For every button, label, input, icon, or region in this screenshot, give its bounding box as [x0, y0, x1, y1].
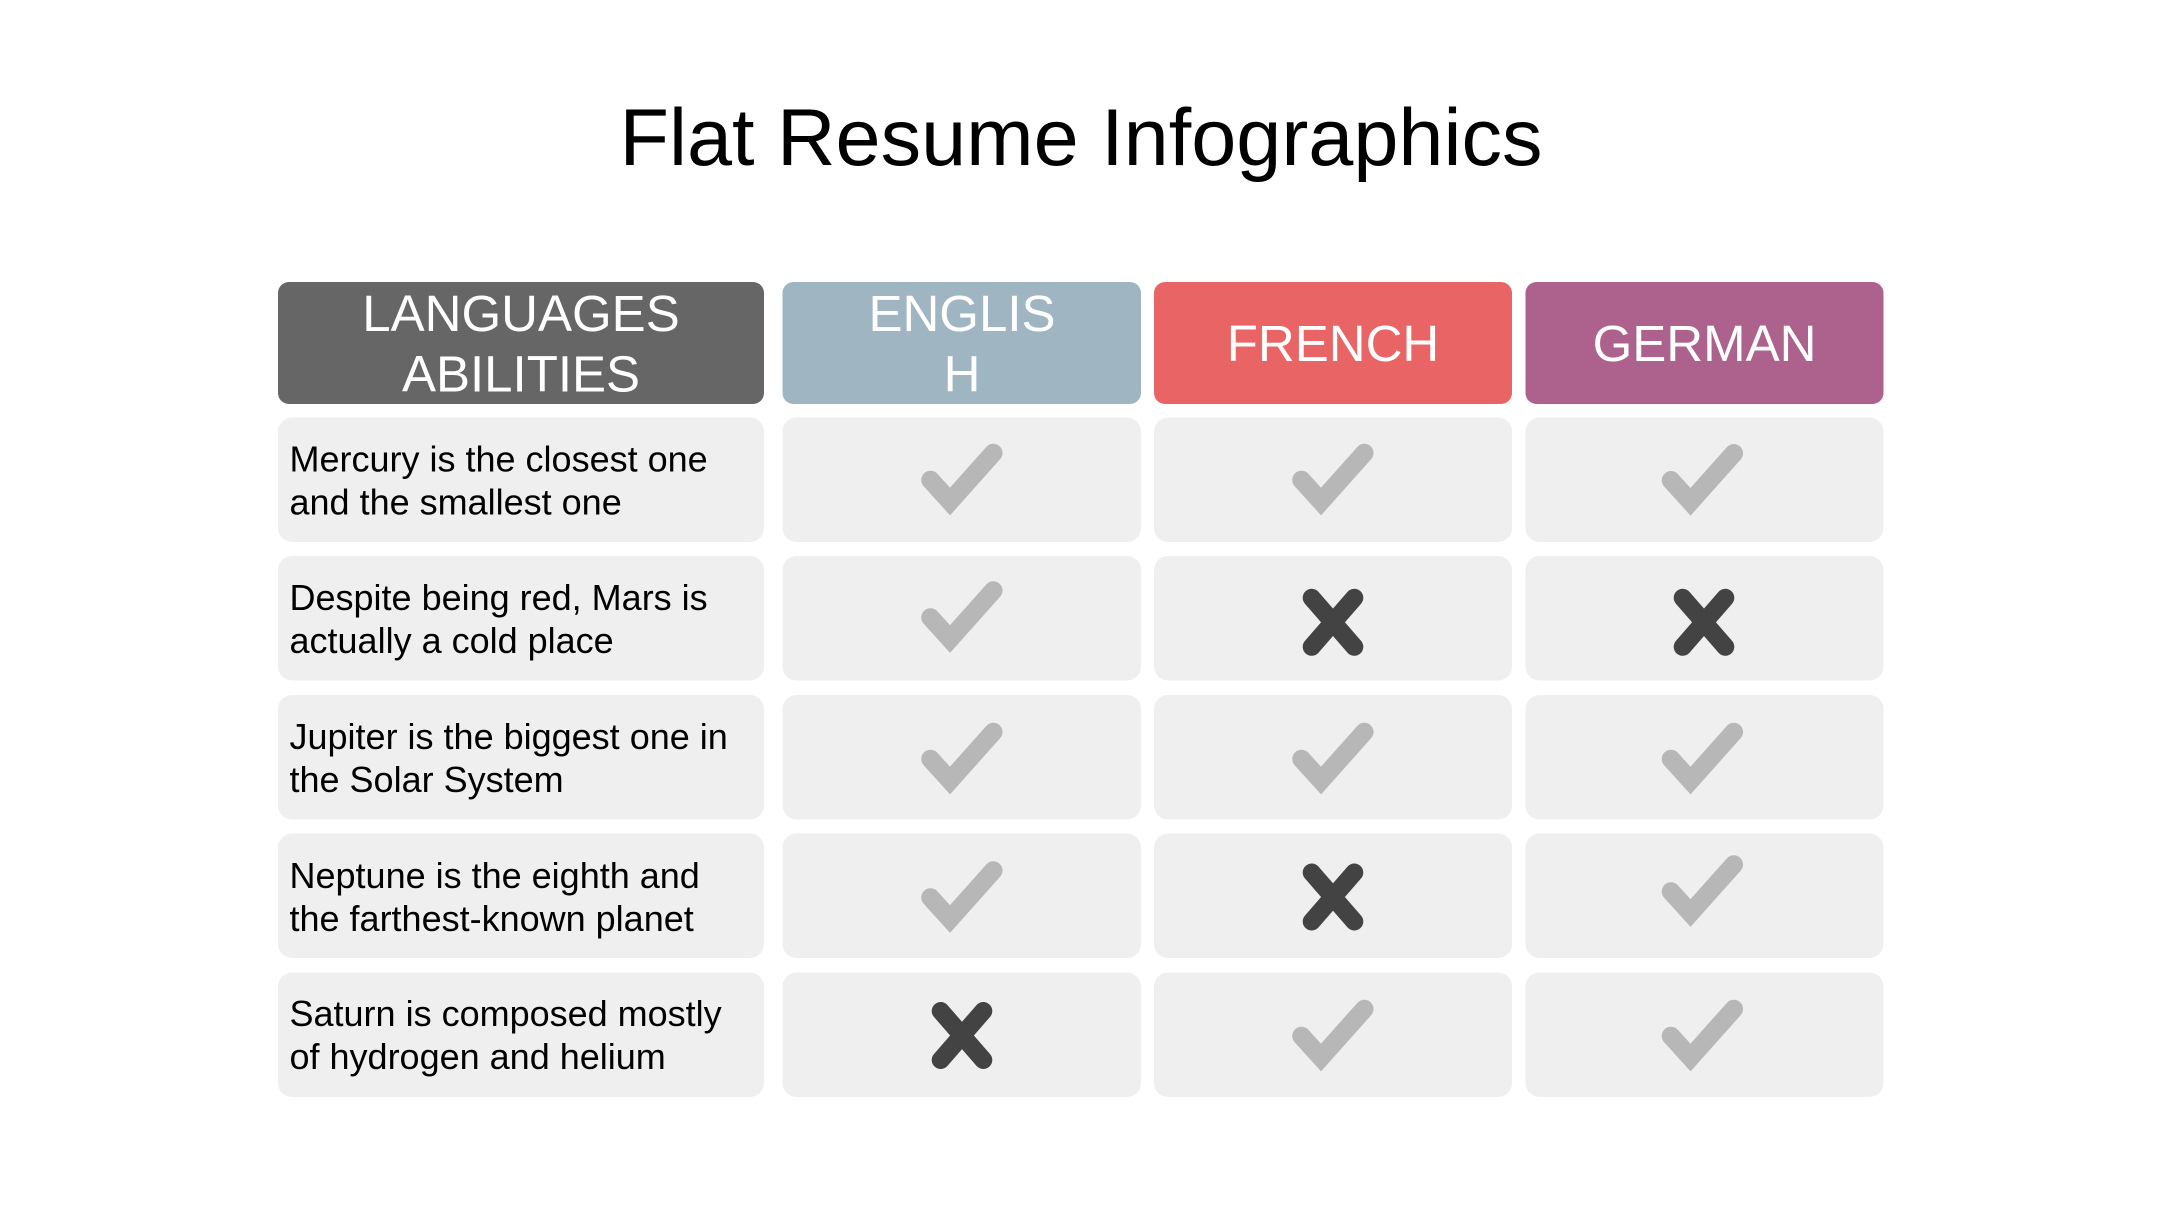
row 1: mercury [278, 418, 1884, 542]
row 1 german: check [1526, 418, 1884, 542]
row 3 english: check [782, 695, 1141, 820]
header: german [1526, 282, 1884, 404]
header: languages abilities: LANGUAGES [362, 285, 680, 342]
row 1 description [278, 418, 764, 542]
row 4: neptune [278, 834, 1884, 958]
row 2: mars [278, 556, 1884, 680]
header: english: H [944, 346, 980, 402]
row 4 english: check [782, 834, 1141, 958]
row 5 english: cross [782, 972, 1141, 1097]
row 1 description: and the smallest one [290, 482, 622, 522]
row 2 english: check [782, 556, 1141, 680]
row 2 german: cross [1526, 556, 1884, 680]
row 5 description: of hydrogen and helium [290, 1036, 666, 1077]
row 2 description: actually a cold place [290, 620, 614, 661]
row 1 english: check [782, 418, 1141, 542]
row 1 french: check [1154, 418, 1512, 542]
row 3 french: check [1154, 695, 1512, 820]
row 2 description [278, 556, 764, 680]
row 1 description: Mercury is the closest one [290, 438, 708, 480]
row 5 german: check [1526, 972, 1884, 1097]
header: german: GERMAN [1593, 315, 1816, 372]
row 3: jupiter [278, 695, 1884, 820]
header: languages abilities: ABILITIES [402, 346, 640, 402]
header: french [1154, 282, 1512, 404]
row 3 description: the Solar System [290, 759, 564, 800]
title: Flat Resume Infographics [620, 93, 1542, 183]
row 5 description [278, 972, 764, 1097]
row 2 description: Despite being red, Mars is [290, 577, 708, 618]
row 5 french: check [1154, 972, 1512, 1097]
row 4 german: check [1526, 834, 1884, 958]
header: french: FRENCH [1227, 315, 1439, 372]
header: english [782, 282, 1141, 404]
row 4 description [278, 834, 764, 958]
row 5: saturn [278, 972, 1884, 1097]
row 5 description: Saturn is composed mostly [290, 993, 722, 1034]
row 4 description: Neptune is the eighth and [290, 855, 700, 896]
row 4 french: cross [1154, 834, 1512, 958]
row 2 french: cross [1154, 556, 1512, 680]
row 3 description: Jupiter is the biggest one in [290, 716, 728, 757]
header: languages abilities [278, 282, 764, 404]
row 3 german: check [1526, 695, 1884, 820]
header: english: ENGLIS [868, 285, 1056, 342]
row 4 description: the farthest-known planet [290, 898, 694, 939]
row 3 description [278, 695, 764, 820]
